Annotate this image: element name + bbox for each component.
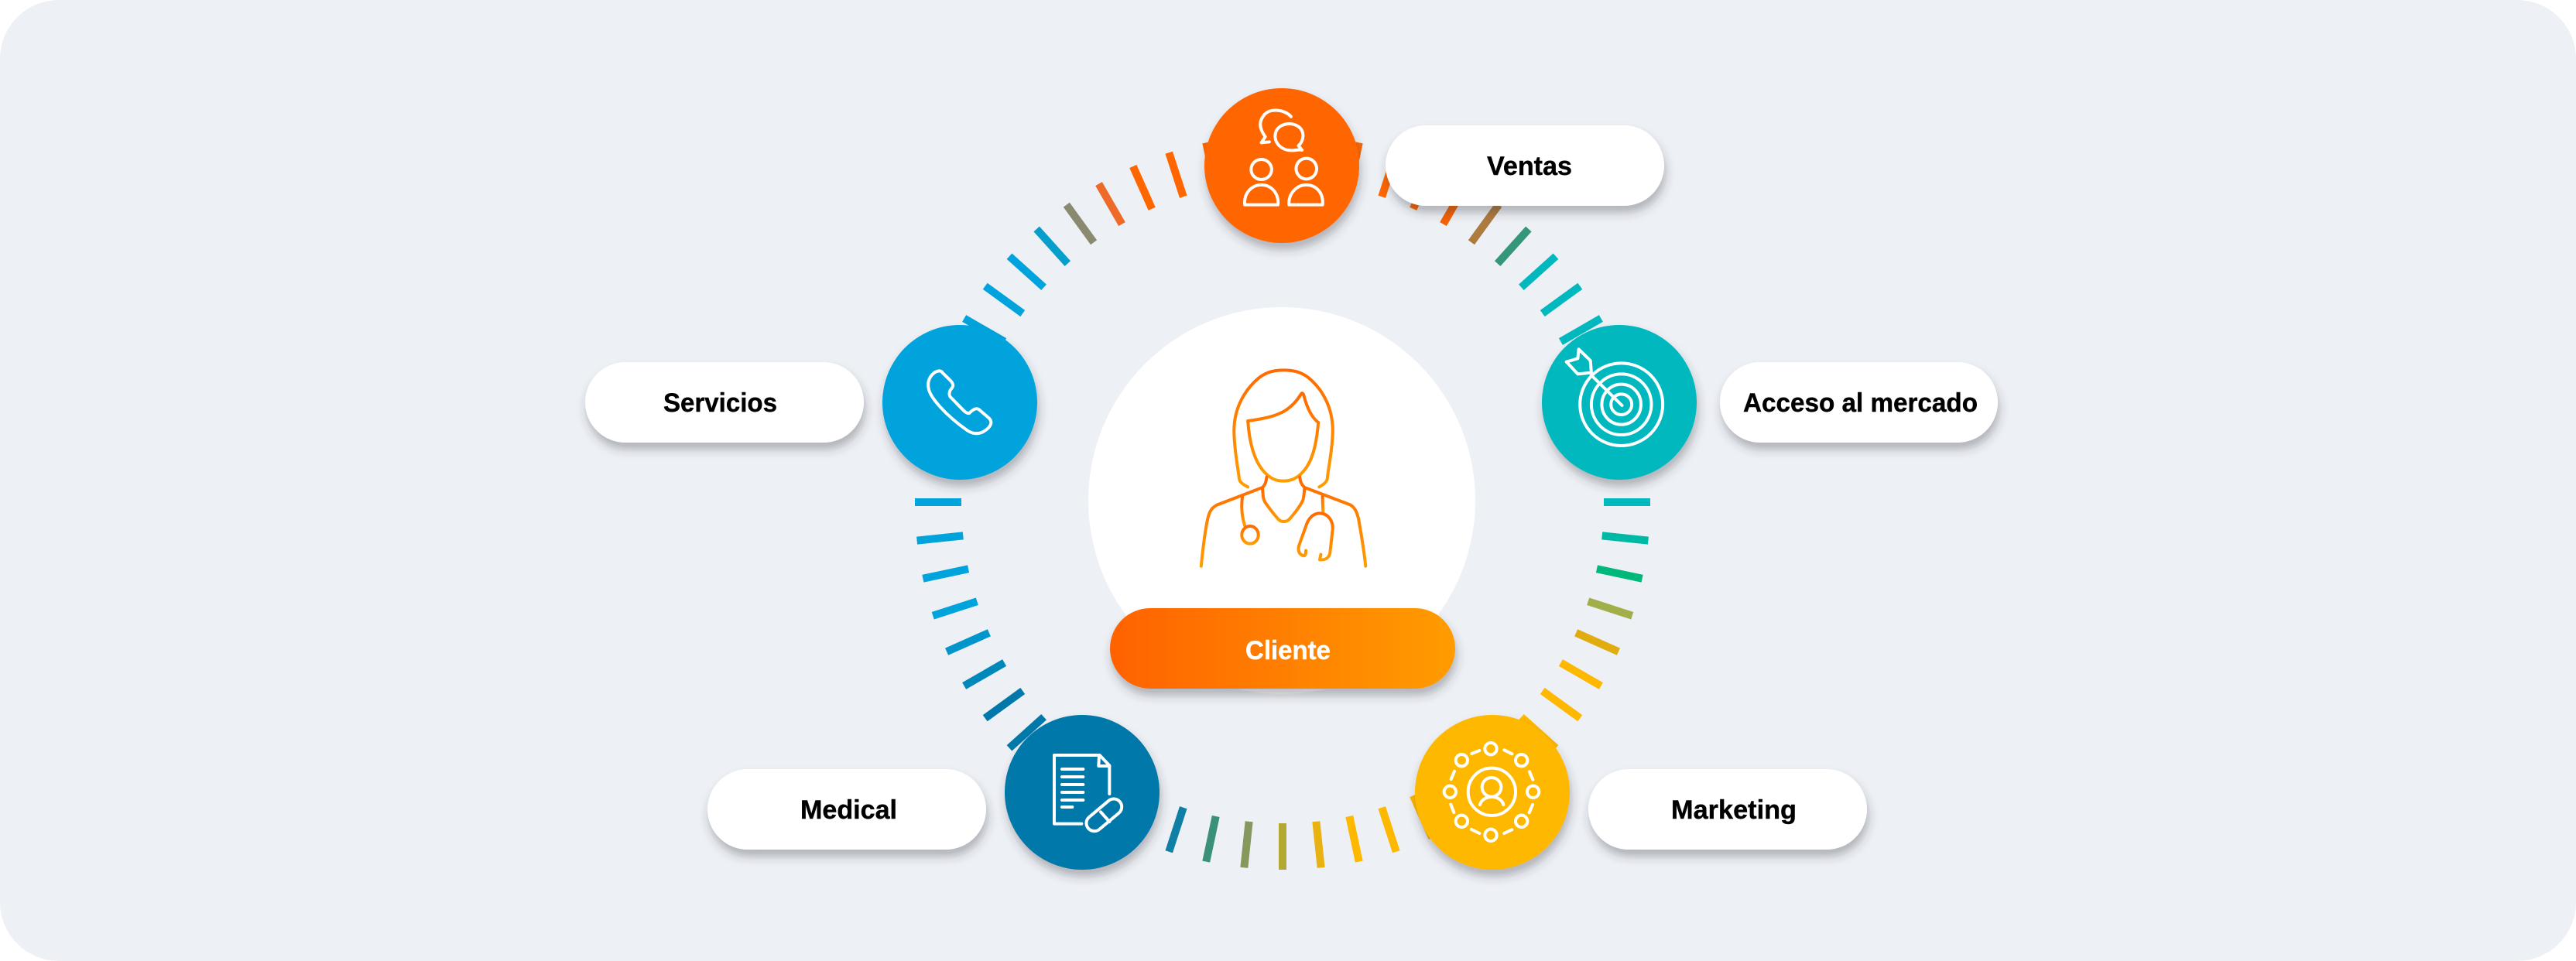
node: Servicios circle: [882, 325, 1037, 480]
label: Marketing: Marketing: [1671, 795, 1797, 825]
label: Medical: Medical: [800, 795, 897, 825]
icon: document and pill: [1054, 755, 1125, 834]
label: Ventas: Ventas: [1487, 152, 1572, 181]
node: Marketing circle: [1415, 715, 1570, 870]
icon: target with arrow: [1567, 349, 1663, 446]
label: Servicios: Servicios: [663, 388, 777, 418]
icon: telephone handset: [928, 371, 991, 433]
icon: female doctor with stethoscope: [1201, 370, 1365, 566]
label: Ventas: [1386, 125, 1664, 206]
central white circle: [1088, 307, 1475, 694]
node: Medical circle: [1005, 715, 1160, 870]
node: Ventas circle: [1204, 88, 1359, 243]
pill: Cliente: [1110, 608, 1455, 689]
label: Medical: [707, 769, 986, 850]
tick ring connecting the five departments: [915, 142, 1650, 870]
label: Acceso al mercado: [1720, 362, 1998, 443]
label: Acceso al mercado: Acceso al mercado: [1743, 388, 1978, 418]
label: Marketing: [1588, 769, 1867, 850]
pill: Cliente: Cliente: [1245, 636, 1331, 665]
icon: chat bubbles and two people: [1245, 111, 1323, 205]
icon: person surrounded by network: [1444, 743, 1539, 841]
node: Acceso al mercado circle: [1542, 325, 1697, 480]
label: Servicios: [585, 362, 864, 443]
